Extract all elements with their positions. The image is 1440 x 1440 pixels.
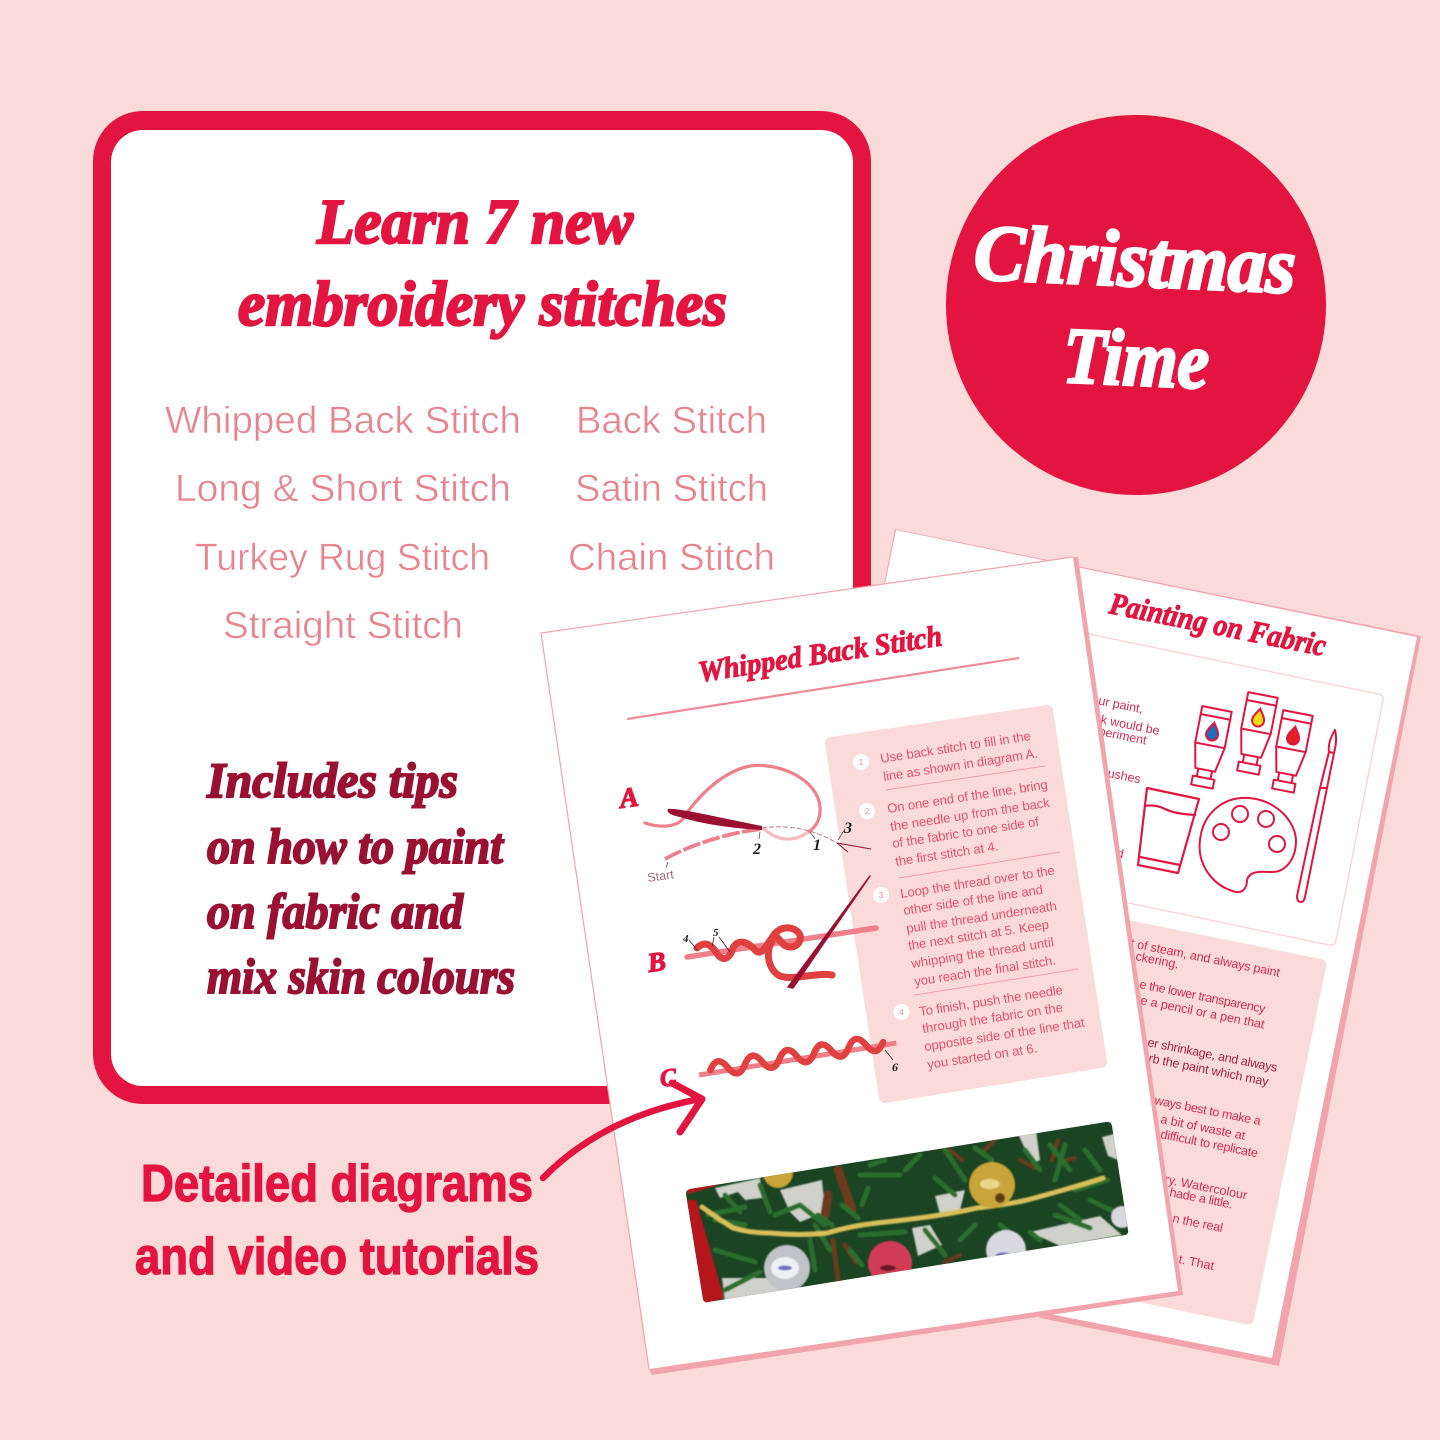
materials text	[1090, 692, 1161, 861]
text block: includes tips: Includes tips	[206, 752, 458, 808]
materials text: ck would be	[1093, 711, 1161, 738]
step numbers: 3	[879, 891, 884, 900]
stitch list: Straight Stitch	[223, 605, 463, 647]
painting tips text: ways best to make a	[1152, 1093, 1262, 1128]
steps text: the next stitch at 5. Keep	[907, 917, 1050, 953]
painting tips text: t of steam, and always paint	[1129, 936, 1282, 980]
diagram A: Start	[646, 867, 675, 885]
badge: christmas time: Time	[1061, 312, 1211, 406]
icon: paint tube red	[1268, 710, 1313, 793]
diagram A: 2	[752, 841, 761, 858]
steps text: Use back stitch to fill in the	[879, 728, 1032, 766]
icon: paint tube yellow	[1233, 692, 1278, 775]
materials text: periment	[1097, 724, 1148, 748]
diagram A: 1	[813, 837, 821, 854]
steps text: you started on at 6.	[926, 1040, 1038, 1072]
painting tips text: t. That	[1177, 1252, 1216, 1273]
steps text: line as shown in diagram A.	[882, 746, 1039, 784]
materials text: rushes	[1102, 765, 1142, 786]
stitch list: Satin Stitch	[575, 468, 768, 510]
stitch list: Back Stitch	[576, 400, 767, 442]
diagram B: 4	[682, 933, 689, 945]
gold rope	[702, 1178, 1103, 1234]
page: whipped back stitch	[541, 557, 1183, 1375]
steps text: other side of the line and	[902, 882, 1044, 918]
painting tips text: hade a little.	[1168, 1185, 1234, 1211]
diagram C: C	[658, 1064, 679, 1093]
painting tips text: rb the paint which may	[1147, 1051, 1271, 1089]
step numbers	[853, 754, 910, 1020]
text block: includes tips	[206, 752, 515, 1004]
silver bauble right	[985, 1228, 1027, 1257]
materials text: our paint,	[1090, 692, 1144, 716]
painting tips text: ry. Watercolour	[1163, 1172, 1249, 1202]
step dividers	[886, 766, 1078, 995]
stitch list	[165, 400, 775, 647]
stitch list: Turkey Rug Stitch	[195, 537, 490, 579]
panel: materials	[1070, 630, 1383, 945]
step numbers: 1	[859, 758, 864, 767]
page: painting on fabric	[800, 529, 1421, 1366]
step numbers: 2	[865, 807, 870, 816]
steps text: you reach the final stitch.	[913, 953, 1057, 989]
heading: painting on fabric: Painting on Fabric	[1106, 585, 1329, 663]
panel: painting tips	[1000, 920, 1326, 1324]
heading: learn 7 new stitches: embroidery stitches	[238, 268, 727, 339]
painting tips text	[1129, 936, 1282, 1273]
gold bauble	[969, 1162, 1015, 1208]
steps text: To finish, push the needle	[918, 982, 1064, 1019]
stitch list: Whipped Back Stitch	[165, 400, 521, 442]
white canvas patches	[715, 1130, 1122, 1302]
painting tips text: a bit of waste at	[1159, 1112, 1247, 1143]
panel: instructions	[831, 711, 1101, 1097]
badge: christmas time	[946, 115, 1326, 495]
painting tips text: difficult to replicate	[1159, 1127, 1259, 1160]
stitch list: Chain Stitch	[568, 537, 775, 579]
heading: whipped back stitch: Whipped Back Stitch	[696, 620, 944, 689]
diagram B	[645, 876, 876, 988]
red edge of fabric	[686, 1200, 724, 1305]
painting tips text: ckering.	[1134, 949, 1180, 972]
icon: paint brush	[1297, 730, 1336, 902]
steps text: opposite side of the line that	[923, 1015, 1086, 1054]
callout: detailed diagrams: and video tutorials	[135, 1228, 539, 1286]
diagram B: 5	[713, 927, 719, 939]
diagram C: 6	[892, 1060, 898, 1074]
callout: detailed diagrams: Detailed diagrams	[141, 1155, 533, 1213]
painting tips text: e a pencil or a pen that	[1139, 993, 1266, 1032]
materials text: d	[1115, 846, 1125, 861]
step numbers: 4	[899, 1008, 904, 1017]
arrow: points from callout to diagram	[543, 1083, 702, 1178]
painting tips text: e the lower transparency	[1138, 977, 1267, 1016]
text block: includes tips: on fabric and	[207, 883, 464, 939]
text block: includes tips: mix skin colours	[207, 948, 515, 1004]
brown stems	[825, 1140, 1075, 1280]
icon: paint tube blue	[1187, 706, 1232, 789]
diagram A	[616, 765, 871, 885]
icon: palette	[1200, 798, 1296, 892]
steps text: through the fabric on the	[921, 1000, 1064, 1036]
red bauble	[867, 1240, 913, 1276]
callout: detailed diagrams	[135, 1155, 539, 1286]
diagram B: B	[645, 946, 668, 978]
painting tips text: er shrinkage, and always	[1146, 1035, 1279, 1075]
steps text: the needle up from the back	[889, 795, 1051, 834]
steps text: whipping the thread until	[909, 934, 1055, 971]
diagram A: A	[616, 782, 640, 815]
panel: main card	[93, 111, 871, 1104]
icon: water glass	[1138, 788, 1199, 873]
steps text: the first stitch at 4.	[894, 838, 999, 869]
diagram C	[658, 1033, 898, 1093]
silver bauble left	[764, 1245, 810, 1291]
stitch list: Long & Short Stitch	[175, 468, 511, 510]
diagram A: 3	[843, 820, 852, 837]
steps text: of the fabric to one side of	[891, 814, 1040, 851]
text block: includes tips: on how to paint	[207, 818, 505, 874]
steps text: pull the thread underneath	[905, 898, 1058, 936]
painting tips text: n the real	[1171, 1211, 1224, 1235]
green stitches	[708, 1145, 1115, 1290]
badge: christmas time: Christmas	[972, 209, 1298, 311]
steps text: On one end of the line, bring	[886, 777, 1049, 816]
heading: learn 7 new stitches: Learn 7 new	[316, 186, 633, 257]
photo: embroidered tree with baubles	[686, 1122, 1128, 1302]
heading: learn 7 new stitches	[238, 186, 727, 339]
steps text	[879, 728, 1086, 1072]
steps text: Loop the thread over to the	[899, 863, 1056, 901]
